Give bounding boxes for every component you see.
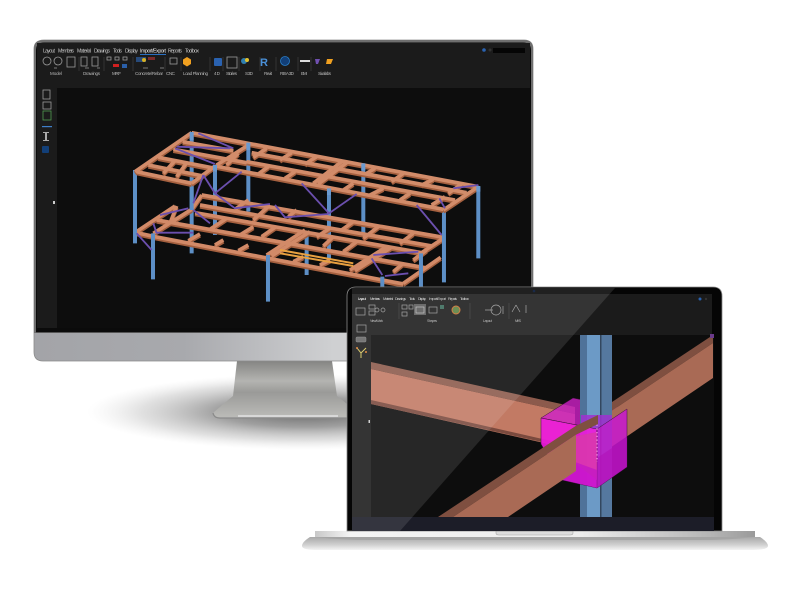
laptop menu tabs: Members [370,296,380,301]
monitor tool sidebar [37,88,57,328]
laptop sidebar icons [356,325,370,423]
monitor toolbar [37,43,530,88]
laptop sidebar [352,335,371,517]
bolts [596,421,598,462]
monitor stand [213,361,357,418]
monitor chin highlight line [36,332,531,333]
monitor ribbon labels: RISA 3D [280,71,295,76]
monitor search box [482,48,525,53]
monitor menu tabs: Members [58,48,74,54]
laptop menu tabs: Tools [409,296,415,301]
laptop menu tabs [358,296,469,301]
column tops [192,132,478,195]
monitor menu tabs: Display [125,48,138,54]
laptop menu tabs: Display [418,296,426,301]
monitor menu tabs: Material [77,48,91,54]
monitor ribbon labels: Model [50,71,62,76]
monitor menu tabs: Reports [168,48,182,54]
monitor ribbon labels: Revit [264,71,273,76]
monitor menu tabs [43,48,199,54]
monitor ribbon labels: Stories [226,71,238,76]
laptop toolbar [352,294,712,335]
monitor menu tabs: Tools [113,48,122,54]
highlighted yellow beam [280,250,353,266]
3D steel frame model [135,132,478,302]
laptop base [315,531,755,540]
monitor ribbon labels: Concrete/Rebar [135,71,163,76]
monitor menu tabs: Toolbox [185,48,199,54]
monitor ribbon labels: Drawings [83,71,101,76]
monitor menu tabs: Import/Export [140,48,167,54]
laptop bottom band [352,517,714,531]
monitor ribbon labels: MRF [112,71,121,76]
laptop viewport [371,335,714,517]
active tab underline [140,54,166,55]
laptop menu tabs: Layout [358,296,367,301]
magenta connection box [541,409,627,488]
laptop menu tabs: Toolbox [460,296,469,301]
monitor ribbon labels: S3D [245,71,254,76]
monitor menu tabs: Drawings [94,48,110,54]
laptop ribbon labels: View/Work [370,319,383,323]
far columns [192,133,478,275]
screen glare [352,288,615,531]
laptop ribbon labels [370,319,522,323]
laptop menu tabs: Material [383,296,393,301]
monitor ribbon labels: EMI [301,71,307,76]
near columns [135,170,444,302]
monitor ribbon labels: CNC [166,71,176,76]
laptop menu tabs: Drawings [395,296,406,301]
top notification dots [698,298,714,338]
pink horizontal beam [371,362,575,450]
lower floor beams [135,195,443,286]
laptop shadow [302,537,768,550]
monitor body: R [260,57,268,69]
upper floor beams [135,133,478,212]
selected shape buttons [414,304,460,315]
monitor body [34,40,533,361]
purple bracing [137,133,478,276]
laptop ribbon labels: MKS [515,319,522,323]
monitor ribbon icons [43,57,311,71]
monitor ribbon labels: 4D [214,71,221,76]
upper right beam [612,335,713,411]
laptop body [347,287,722,531]
laptop ribbon labels: Layout [483,319,492,323]
laptop menu tabs: Import/Export [429,296,447,301]
monitor menu tabs: Layout [43,48,56,54]
blue column [580,335,612,517]
lower diagonal beam [438,415,598,517]
monitor viewport [57,88,530,328]
laptop ribbon icons [356,303,526,319]
monitor ribbon labels: Load Planning [183,71,208,76]
laptop ribbon labels: Shapes [427,319,437,323]
laptop camera [533,290,535,292]
box top face behind column [541,398,627,429]
laptop menu tabs: Reports [448,296,457,301]
monitor shadow [87,374,523,450]
monitor ribbon labels [50,71,332,76]
monitor ribbon labels: Sivalabs [318,71,332,76]
